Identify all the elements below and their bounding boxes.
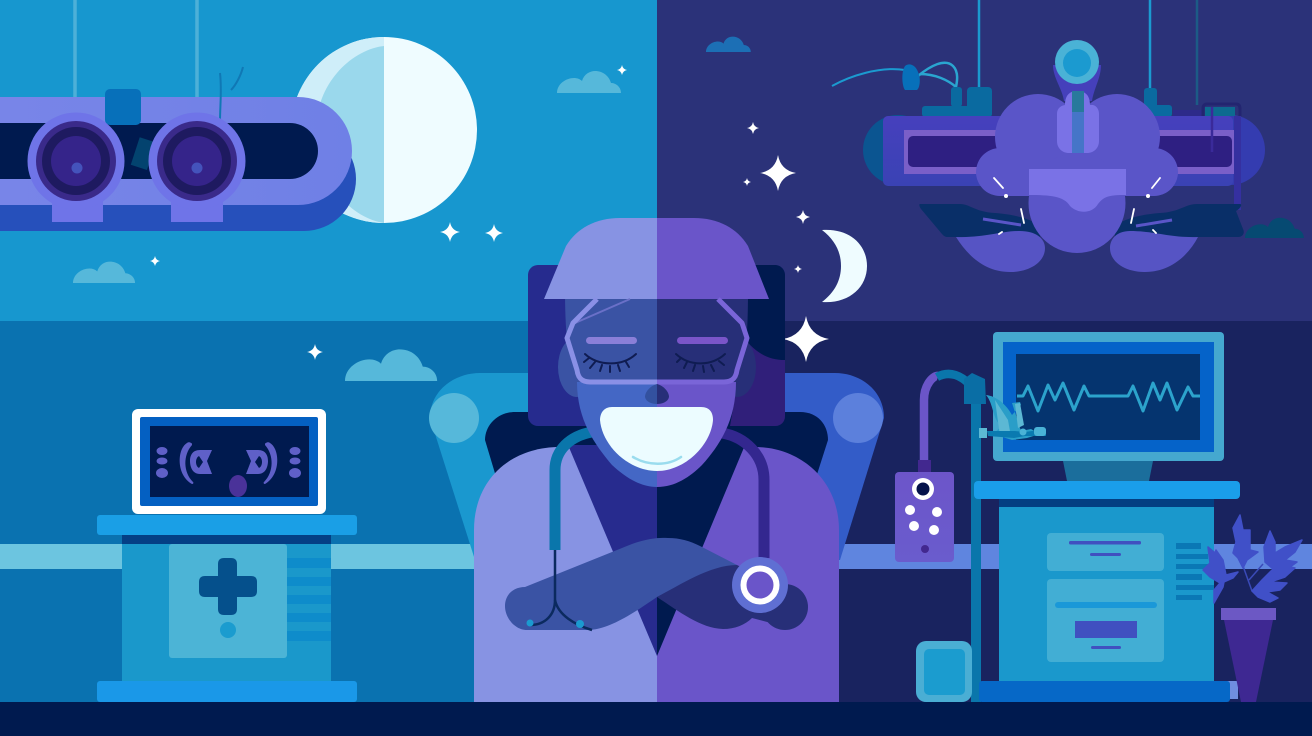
tilted square (131, 137, 156, 170)
surgical cap (544, 218, 769, 299)
coat (474, 445, 839, 702)
bed slab right (1115, 204, 1244, 237)
doctor seated in chair (429, 218, 884, 702)
crossed arms (505, 538, 808, 630)
lens right (148, 112, 246, 222)
rods (979, 0, 1150, 88)
knob (1055, 40, 1099, 84)
nose (645, 384, 669, 404)
centre pill (1057, 91, 1099, 153)
mask connector (964, 373, 1046, 440)
vents (1176, 543, 1214, 600)
closed eyes (584, 354, 725, 372)
control box with tube (895, 374, 970, 562)
machine: daytime scanner (0, 0, 356, 231)
lens left (28, 112, 124, 222)
hanging rods (75, 0, 197, 97)
wire and clamp (832, 63, 957, 90)
patient neck and head (1053, 65, 1101, 101)
crescent moon (822, 230, 867, 302)
square canister (916, 641, 972, 702)
small cable (220, 67, 243, 122)
mount blocks (922, 87, 1172, 117)
lower panel (1047, 579, 1164, 662)
right monitor, pole and cabinet (895, 332, 1302, 702)
stars, moon and clouds: night sky (706, 37, 1304, 362)
mouth (600, 407, 713, 471)
left monitor and cabinet (97, 409, 357, 702)
heart monitor (993, 332, 1224, 481)
scanner body (883, 116, 1233, 186)
cabinet base (979, 681, 1230, 702)
ears (558, 337, 756, 397)
stethoscope chest piece (732, 557, 788, 613)
cloud (1245, 218, 1304, 238)
cloud (706, 37, 751, 52)
top block (105, 89, 141, 125)
stethoscope tubes (555, 432, 764, 558)
face (565, 290, 748, 487)
end caps (863, 115, 933, 185)
right frame (1173, 104, 1241, 210)
chair back (485, 412, 828, 490)
potted plant (1203, 515, 1302, 702)
chair arms (429, 373, 884, 560)
eyebrows (586, 337, 728, 344)
base end tab (1226, 681, 1238, 699)
pole (971, 400, 981, 702)
monitor (132, 409, 326, 514)
patient legs (956, 231, 1045, 272)
headrest (528, 265, 785, 426)
machine: night scanner with patient (832, 0, 1265, 272)
upper panel (1047, 533, 1164, 571)
cabinet (974, 481, 1240, 684)
medical cross (199, 558, 257, 615)
mask panel (1029, 169, 1126, 212)
goggles (567, 299, 747, 382)
stethoscope earpieces (526, 550, 592, 630)
hair strand (575, 299, 630, 323)
white ticks (994, 178, 1160, 234)
patient cloud body (976, 94, 1178, 253)
stars and clouds: day sky (73, 65, 627, 381)
half moon (291, 37, 477, 223)
cabinet (97, 515, 357, 702)
bed slab left (919, 204, 1040, 237)
